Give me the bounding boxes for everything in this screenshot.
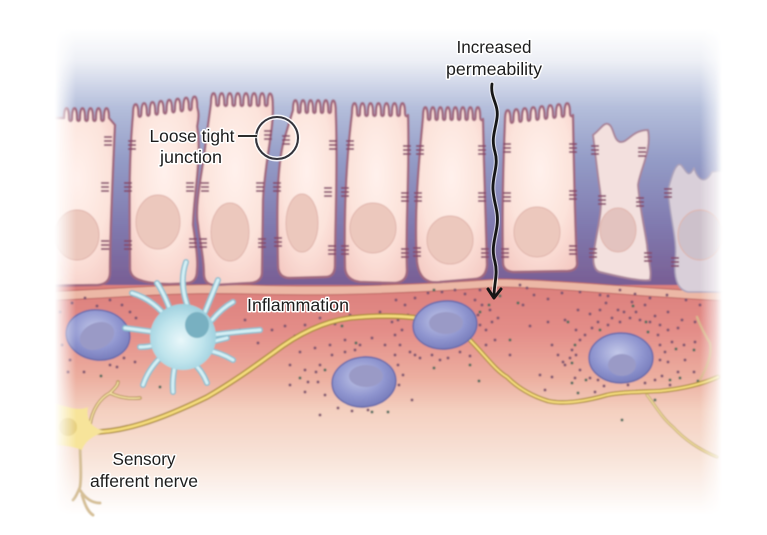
nerve cell body (50, 402, 105, 450)
dendritic cell (125, 262, 260, 392)
label: sensory afferent nerve: Sensory (112, 449, 176, 469)
cell 9: damaged and faded (668, 165, 730, 292)
nerve fibre core (85, 316, 718, 457)
connective tissue layer (0, 285, 767, 515)
immune cell C (411, 298, 479, 352)
immune cell A (63, 306, 133, 364)
label: increased permeability: permeability (446, 59, 542, 79)
cell 4 (277, 100, 337, 278)
label: increased permeability: Increased (456, 37, 532, 57)
cell 1 (40, 108, 115, 286)
immune cell D (589, 333, 653, 383)
label: loose tight junction: junction (159, 147, 222, 167)
cell nuclei (55, 194, 722, 264)
cell 5 (345, 103, 408, 283)
edge fade right (700, 0, 722, 535)
dendrite spikes core (125, 262, 260, 392)
nerve fibre outline (73, 316, 718, 515)
callout: loose tight junction circle (238, 117, 298, 159)
sensory nerve (50, 316, 718, 515)
immune cell B (330, 354, 398, 410)
edge fill right (722, 0, 767, 535)
label: inflammation: Inflammation (247, 295, 349, 315)
dendritic cell nucleus (185, 312, 209, 338)
epithelial cells (40, 93, 730, 292)
arrow: permeability pathway (488, 84, 501, 298)
label: loose tight junction: Loose tight (150, 126, 235, 146)
cell 6 (416, 107, 487, 282)
cell 2 (130, 97, 199, 284)
lumen background (0, 28, 767, 293)
cell 3 (197, 93, 273, 285)
dendrite spikes outline (125, 262, 260, 392)
label: loose tight junction (150, 126, 235, 167)
label: sensory afferent nerve: afferent nerve (90, 471, 198, 491)
tight junction marks (101, 131, 679, 266)
basement membrane (40, 279, 730, 301)
dendritic cell body (150, 304, 216, 370)
label: sensory afferent nerve (90, 449, 198, 491)
cell 8: damaged (593, 124, 651, 280)
cell 7 (503, 103, 577, 272)
label: increased permeability (446, 37, 542, 79)
edge fade left (0, 0, 76, 535)
mediator particles: inflammation dots (60, 285, 700, 420)
